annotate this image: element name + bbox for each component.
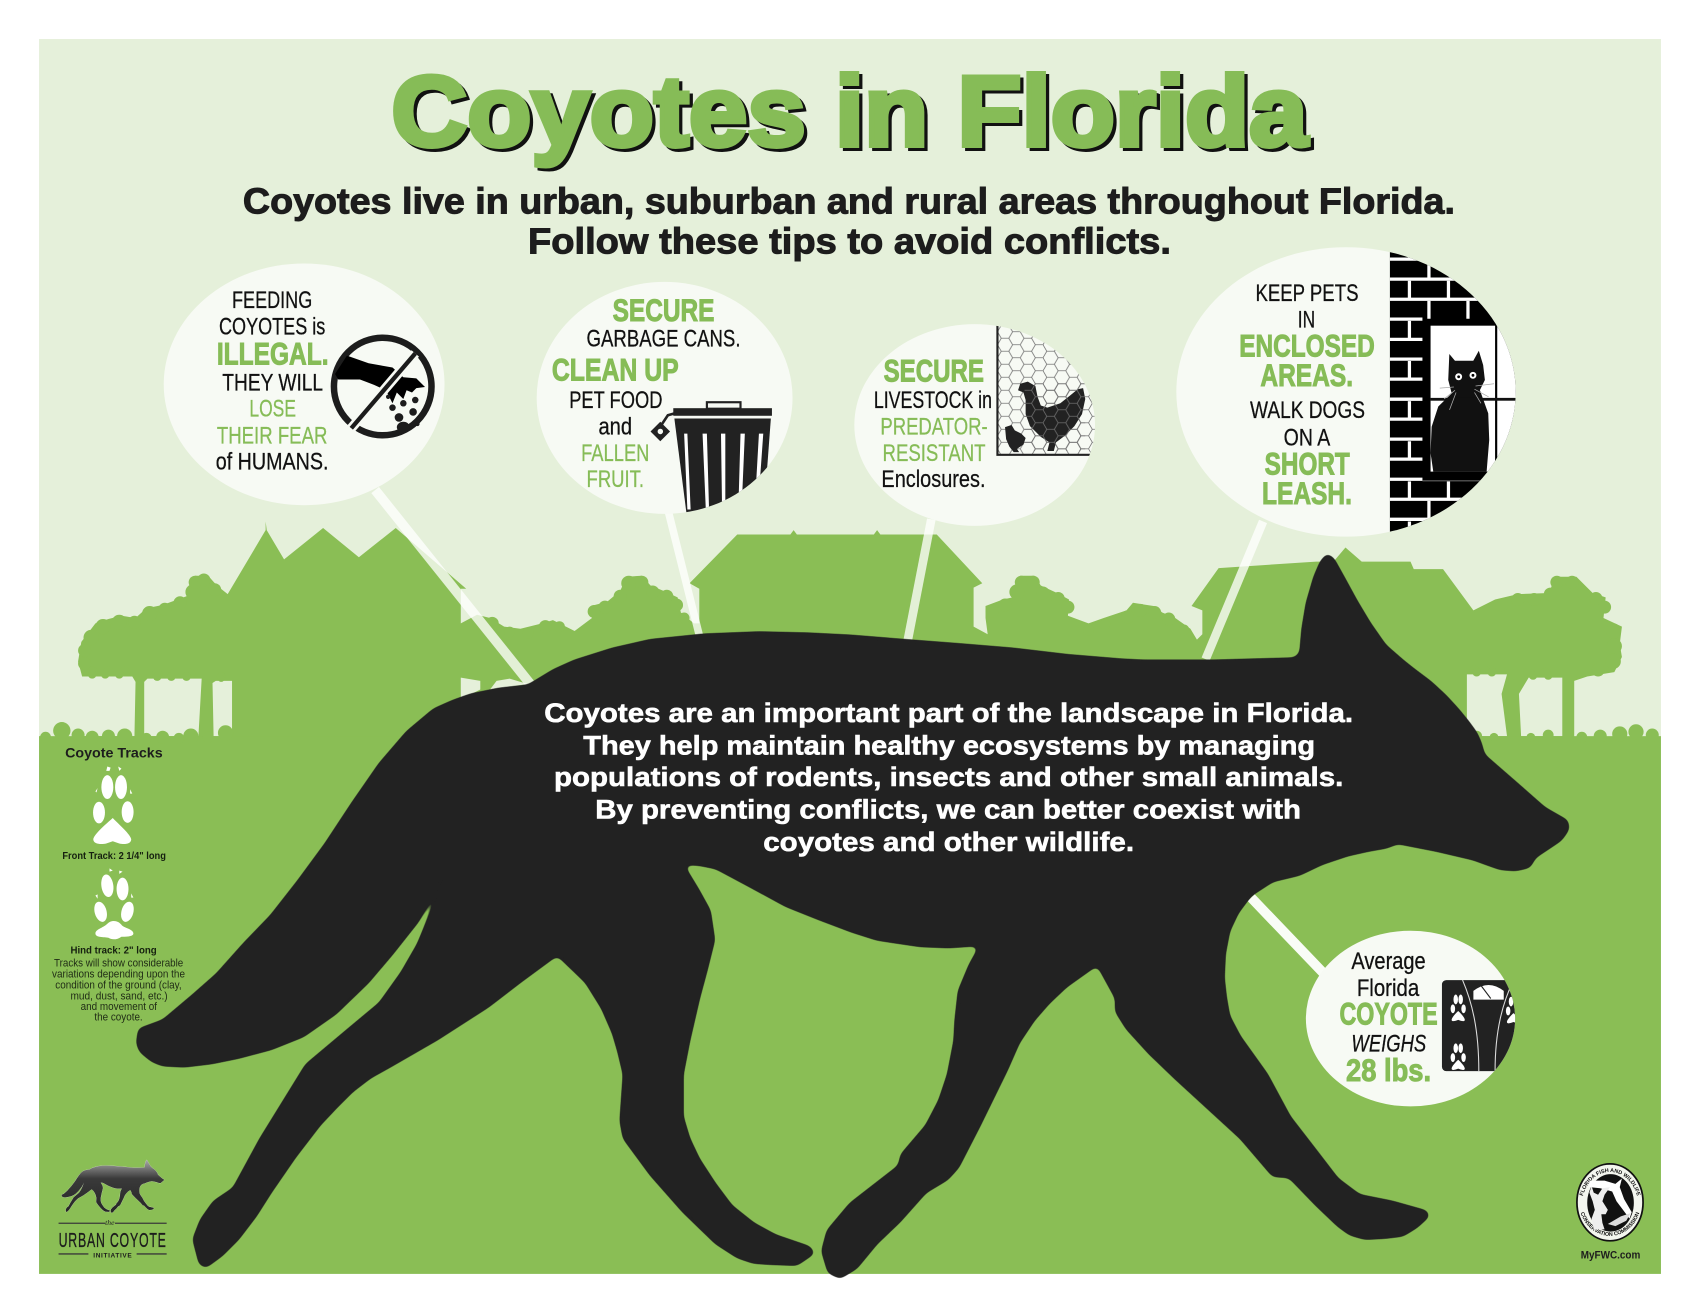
panel: garbage and pet food tip [537, 282, 793, 520]
panel: pets and dogs tip: LEASH. [1262, 476, 1352, 511]
panel: feeding coyotes tip [164, 263, 445, 505]
panel: pets and dogs tip: ON A [1284, 425, 1331, 452]
panel: feeding coyotes tip: THEIR FEAR [217, 422, 327, 449]
logo: Urban Coyote Initiative [59, 1160, 167, 1259]
panel: coyote tracks: Hind track: 2" long [70, 945, 157, 956]
panel: feeding coyotes tip: FEEDING [232, 287, 312, 314]
subtitle [243, 182, 1455, 262]
panel: coyote tracks: Front Track: 2 1/4" long [62, 851, 166, 862]
panel: garbage and pet food tip: FRUIT. [587, 466, 644, 493]
icon: no feeding [334, 338, 432, 435]
tree canopy scallops [78, 574, 1622, 681]
panel: feeding coyotes tip: ILLEGAL. [217, 336, 329, 371]
logo: FWC seal [1576, 1163, 1644, 1242]
panel: garbage and pet food tip: GARBAGE CANS. [587, 325, 740, 352]
panel: pets and dogs tip: WALK DOGS [1250, 397, 1365, 424]
panel: average weight: 28 lbs. [1346, 1053, 1431, 1088]
icon: locked trash can [651, 402, 772, 520]
text: tracks note: the coyote. [94, 1012, 143, 1024]
panel: feeding coyotes tip: of HUMANS. [216, 448, 329, 475]
panel: coyote tracks: Coyote Tracks [65, 745, 163, 761]
panel: average weight: COYOTE [1339, 997, 1438, 1032]
panel: pets and dogs tip: AREAS. [1260, 358, 1353, 393]
text: MyFWC.com: MyFWC.com [1581, 1249, 1640, 1261]
text: tracks note [52, 958, 185, 1024]
subtitle: Follow these tips to avoid conflicts. [528, 222, 1171, 262]
panel: feeding coyotes tip: THEY WILL [222, 369, 323, 396]
body text: They help maintain healthy ecosystems by managing [583, 731, 1315, 761]
panel: livestock tip: RESISTANT [883, 440, 986, 467]
logo: FWC seal: FLORIDA FISH AND WILDLIFE [1579, 1168, 1641, 1196]
title: Coyotes in Florida [395, 60, 1312, 171]
icon: hind track [92, 868, 136, 939]
panel: pets and dogs tip: SHORT [1265, 446, 1350, 481]
text: tracks note: and movement of [81, 1001, 158, 1013]
panel: garbage and pet food tip: and [598, 414, 632, 441]
subtitle: Coyotes live in urban, suburban and rural areas throughout Florida. [243, 182, 1455, 222]
panel: average weight [1306, 931, 1529, 1106]
panel: livestock tip: LIVESTOCK in [874, 387, 992, 414]
panel: livestock tip: Enclosures. [881, 466, 986, 493]
panel: pets and dogs tip: ENCLOSED [1239, 329, 1375, 364]
callout connector lines [375, 490, 1327, 977]
body text: Coyotes are an important part of the landscape in Florida. [544, 698, 1353, 728]
skyline: houses and trees [76, 521, 1622, 748]
panel: pets and dogs tip: IN [1298, 306, 1315, 333]
coyote silhouette [137, 554, 1569, 1278]
panel: garbage and pet food tip: FALLEN [581, 440, 649, 467]
title: Coyotes in Florida [391, 56, 1309, 167]
panel: livestock tip [854, 324, 1097, 526]
panel: livestock tip: SECURE [884, 354, 984, 389]
text: tracks note: variations depending upon the [52, 969, 185, 981]
panel: garbage and pet food tip: SECURE [613, 293, 714, 328]
body text: populations of rodents, insects and other small animals. [554, 762, 1343, 792]
panel: feeding coyotes tip: COYOTES is [219, 313, 325, 340]
panel: pets and dogs tip [1176, 244, 1521, 539]
text: tracks note: condition of the ground (clay, [55, 979, 182, 991]
icon: front track [93, 766, 134, 844]
panel: pets and dogs tip: KEEP PETS [1255, 280, 1358, 307]
panel: garbage and pet food tip: CLEAN UP [552, 353, 679, 388]
logo: Urban Coyote Initiative: INITIATIVE [93, 1252, 132, 1259]
icon: cat in brick window [1390, 244, 1521, 539]
logo: Urban Coyote Initiative: URBAN COYOTE [59, 1229, 166, 1252]
panel: garbage and pet food tip: PET FOOD [569, 387, 662, 414]
panel: coyote tracks [52, 745, 185, 1024]
panel: livestock tip: PREDATOR- [880, 414, 988, 441]
panel: average weight: Average [1351, 948, 1426, 975]
body text [544, 698, 1353, 857]
panel: average weight: WEIGHS [1351, 1031, 1426, 1058]
icon: scale with paw prints [1442, 980, 1516, 1072]
icon: hen and chick behind wire [997, 325, 1097, 455]
text: tracks note: Tracks will show considerable [54, 958, 183, 970]
logo: FWC seal: CONSERVATION COMMISSION [1581, 1212, 1640, 1236]
body text: coyotes and other wildlife. [763, 827, 1134, 857]
text: tracks note: mud, dust, sand, etc.) [70, 990, 168, 1002]
ground [39, 722, 1661, 1274]
panel: feeding coyotes tip: LOSE [249, 395, 296, 422]
body text: By preventing conflicts, we can better coexist with [595, 795, 1301, 825]
panel: average weight: Florida [1357, 975, 1420, 1002]
logo: Urban Coyote Initiative: the [105, 1218, 115, 1227]
